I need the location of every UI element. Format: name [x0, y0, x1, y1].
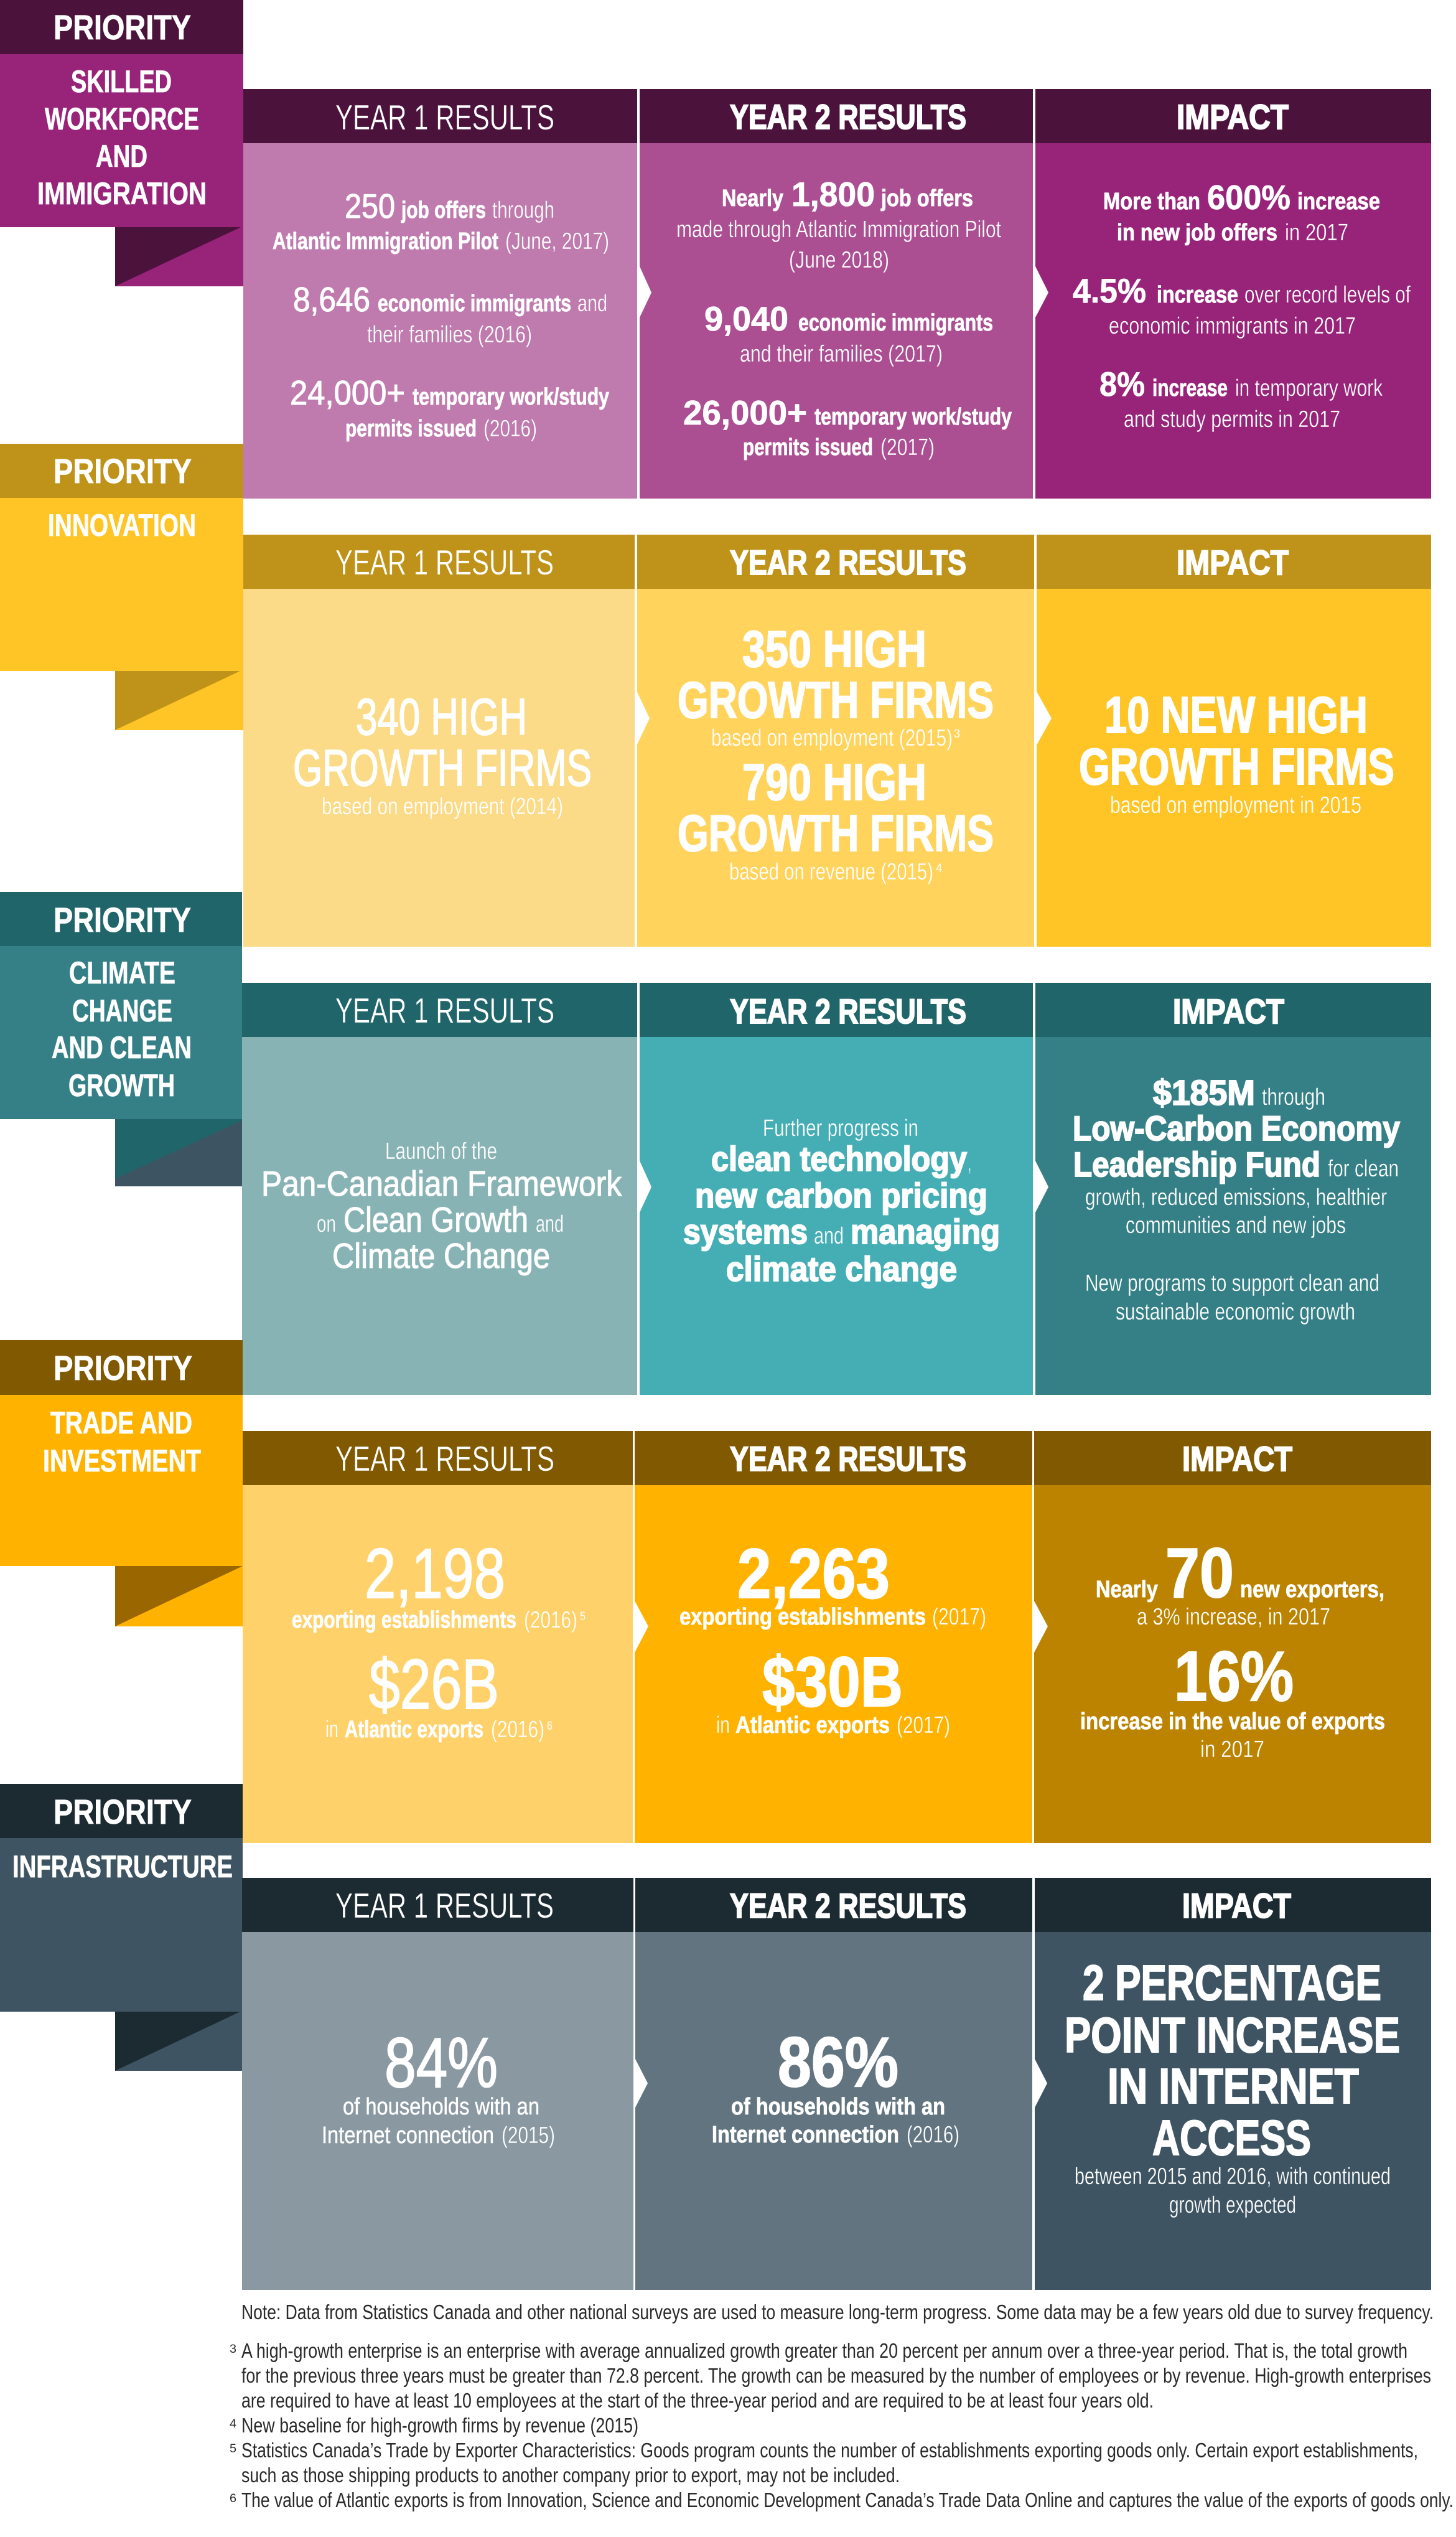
footnotes: are required to have at least 10 employees at the start of the three-year period and are required to be at least four years old. [241, 2389, 1154, 2412]
column: year 2 results [640, 983, 1033, 1395]
column: year 2 results: exporting establishments [679, 1604, 926, 1630]
arrow: year 2 to impact [1035, 2059, 1047, 2108]
column: year 2 results: 2,263 [737, 1534, 890, 1613]
column: impact: Nearly [1096, 1577, 1158, 1603]
column: year 2 results: (2017) [880, 434, 935, 461]
column: impact: communities and new jobs [1126, 1212, 1346, 1239]
column: year 2 results: 790 HIGH [742, 753, 926, 811]
column: impact: ACCESS [1152, 2110, 1311, 2165]
column: year 2 results: (2016) [907, 2122, 959, 2148]
priority ribbon: innovation [0, 444, 243, 730]
column: year 2 results: and [814, 1223, 844, 1249]
row: innovation [0, 444, 1431, 947]
column: year 1 results [243, 1431, 633, 1843]
column: year 2 results: (2017) [897, 1712, 950, 1738]
column: year 2 results: clean technology [711, 1139, 967, 1178]
priority ribbon: trade and investment: PRIORITY [54, 1348, 192, 1387]
column: impact: sustainable economic growth [1116, 1299, 1355, 1325]
column: year 2 results: based on revenue (2015) [729, 859, 933, 885]
priority ribbon: innovation: INNOVATION [48, 508, 196, 543]
footnotes: New baseline for high-growth firms by revenue (2015) [241, 2414, 638, 2437]
column: year 1 results: based on employment (2014) [322, 794, 563, 820]
column: impact: in 2017 [1285, 220, 1348, 246]
row: infrastructure [0, 1784, 1431, 2290]
column: impact: increase [1152, 375, 1228, 401]
column: impact: $185M [1153, 1073, 1255, 1113]
priority ribbon: climate change and clean growth: AND CLEAN [52, 1030, 192, 1065]
column: year 2 results: climate change [726, 1249, 957, 1288]
column: year 1 results: permits issued [345, 416, 477, 442]
column: year 1 results: $26B [369, 1645, 499, 1723]
column: year 2 results [635, 1878, 1032, 2290]
column: year 1 results: Climate Change [332, 1236, 550, 1276]
column: year 1 results: GROWTH FIRMS [293, 739, 592, 797]
column: year 2 results: made through Atlantic Immigration Pilot [676, 217, 1001, 243]
column: impact: 10 NEW HIGH [1104, 686, 1368, 744]
column: year 1 results: (2016) [483, 416, 537, 442]
column: impact [1035, 1878, 1431, 2290]
column: year 2 results: based on employment (2015) [711, 725, 953, 751]
row: trade and investment [0, 1340, 1431, 1843]
column: year 2 results: YEAR 2 RESULTS [730, 1439, 966, 1478]
column: impact: 70 [1165, 1534, 1234, 1612]
column: year 1 results: YEAR 1 RESULTS [335, 1886, 554, 1926]
column: year 1 results: 24,000+ [290, 373, 405, 412]
column: impact: IMPACT [1182, 1886, 1291, 1925]
column: year 1 results: of households with an [343, 2094, 539, 2120]
priority ribbon: climate change and clean growth [0, 892, 242, 1186]
column: year 2 results: new carbon pricing [695, 1176, 987, 1215]
column: year 2 results: of households with an [731, 2094, 945, 2120]
footnotes: such as those shipping products to another company prior to export, may not be included. [241, 2464, 900, 2487]
column: impact: increase in the value of exports [1080, 1709, 1385, 1735]
column: year 1 results: YEAR 1 RESULTS [335, 1439, 554, 1479]
column: year 1 results: on [317, 1211, 336, 1237]
column: year 2 results: 26,000+ [683, 393, 807, 432]
column: year 1 results [242, 983, 637, 1395]
column: year 1 results: (June, 2017) [505, 228, 609, 255]
arrow: year 2 to impact [1035, 1161, 1048, 1212]
priority ribbon: trade and investment: INVESTMENT [43, 1443, 201, 1478]
column: year 2 results: Internet connection [712, 2122, 899, 2148]
priority ribbon: climate change and clean growth: PRIORITY [54, 900, 191, 939]
column: year 2 results: temporary work/study [814, 404, 1012, 430]
priority ribbon: climate change and clean growth: GROWTH [68, 1068, 175, 1103]
column: year 1 results: Atlantic exports [345, 1717, 483, 1743]
column: impact: 8% [1099, 365, 1145, 403]
column: year 2 results: 86% [778, 2023, 898, 2101]
priority ribbon: infrastructure: PRIORITY [54, 1792, 192, 1831]
column: year 2 results: 3 [954, 728, 960, 741]
column: year 1 results: (2015) [502, 2122, 555, 2149]
priority ribbon: skilled workforce and immigration: AND [96, 139, 147, 174]
column: year 2 results: permits issued [743, 434, 873, 461]
column: year 2 results: YEAR 2 RESULTS [730, 543, 966, 582]
column: impact: increase [1297, 189, 1380, 215]
arrow: year 2 to impact [1037, 692, 1052, 745]
footnotes: 6 [230, 2492, 236, 2505]
column: impact: for clean [1328, 1156, 1399, 1182]
column: year 1 results: Pan-Canadian Framework [261, 1164, 622, 1204]
priority ribbon: climate change and clean growth: CLIMATE [69, 955, 175, 990]
column: year 2 results [640, 89, 1033, 499]
column: year 2 results: and their families (2017) [740, 341, 943, 367]
arrow: year 1 to year 2 [640, 1161, 651, 1212]
column: year 1 results: Launch of the [385, 1138, 497, 1165]
column: year 2 results: YEAR 2 RESULTS [730, 992, 966, 1031]
column: impact: new exporters, [1240, 1577, 1384, 1603]
arrow: year 2 to impact [1035, 266, 1048, 317]
column: impact: More than [1103, 189, 1200, 215]
column: year 1 results: exporting establishments [292, 1607, 516, 1633]
column: year 2 results: 350 HIGH [742, 620, 926, 678]
column: year 1 results: YEAR 1 RESULTS [335, 543, 554, 583]
column: year 1 results: 2,198 [365, 1534, 505, 1613]
column: year 1 results: 340 HIGH [356, 688, 527, 746]
column: year 2 results: YEAR 2 RESULTS [730, 97, 966, 136]
column: year 1 results [242, 1878, 633, 2290]
priority ribbon: infrastructure [0, 1784, 243, 2071]
column: year 1 results: Internet connection [322, 2122, 494, 2149]
column: year 1 results: temporary work/study [413, 384, 609, 410]
footnotes: 5 [230, 2442, 236, 2455]
priority ribbon: climate change and clean growth: CHANGE [72, 993, 172, 1028]
column: year 1 results: Atlantic Immigration Pilot [273, 228, 498, 255]
column: impact: over record levels of [1244, 282, 1411, 308]
priority ribbon: innovation: PRIORITY [54, 451, 192, 490]
column: impact: in 2017 [1200, 1737, 1264, 1763]
column: impact: a 3% increase, in 2017 [1137, 1604, 1330, 1630]
priority ribbon: skilled workforce and immigration: IMMIGRATION [37, 176, 207, 211]
column: year 1 results: economic immigrants [378, 291, 571, 317]
column: year 2 results: 9,040 [704, 299, 788, 338]
column: impact: increase [1157, 282, 1238, 308]
column: year 2 results: Further progress in [763, 1115, 918, 1142]
column: impact [1035, 983, 1431, 1395]
column: year 2 results: in [716, 1712, 730, 1738]
column: year 1 results: in [325, 1717, 338, 1743]
column: impact: 4.5% [1073, 271, 1146, 310]
column: impact: Leadership Fund [1073, 1145, 1320, 1184]
column: year 2 results: (2017) [932, 1604, 986, 1630]
column: impact [1035, 89, 1431, 499]
column: impact: growth expected [1169, 2192, 1296, 2218]
column: year 2 results: economic immigrants [798, 310, 993, 336]
column: impact: IMPACT [1177, 97, 1289, 136]
column: year 2 results: GROWTH FIRMS [678, 804, 994, 862]
column: year 2 results [635, 1431, 1032, 1843]
column: year 2 results: 4 [936, 862, 942, 875]
column: year 2 results: , [968, 1150, 971, 1176]
column: year 1 results: (2016) [491, 1717, 544, 1743]
arrow: year 1 to year 2 [635, 1601, 648, 1653]
column: year 2 results: systems [683, 1212, 808, 1251]
column: impact: in new job offers [1117, 220, 1277, 246]
column: impact: 600% [1207, 178, 1290, 217]
column: impact: IMPACT [1173, 992, 1284, 1031]
column: impact [1037, 535, 1431, 947]
column: year 2 results: GROWTH FIRMS [678, 671, 994, 729]
column: year 1 results: and [536, 1211, 564, 1237]
column: year 1 results: 84% [385, 2024, 498, 2102]
column: impact [1034, 1431, 1431, 1843]
column: impact: in temporary work [1235, 375, 1383, 401]
arrow: year 2 to impact [1034, 1601, 1048, 1653]
arrow: year 1 to year 2 [637, 692, 650, 744]
column: year 2 results: Atlantic exports [735, 1712, 890, 1738]
priority ribbon: skilled workforce and immigration: PRIORITY [54, 7, 191, 47]
column: year 1 results: through [492, 197, 554, 223]
arrow: year 1 to year 2 [635, 2059, 648, 2108]
priority ribbon: trade and investment [0, 1340, 243, 1626]
column: year 1 results: (2016) [524, 1607, 577, 1633]
column: year 1 results: job offers [401, 197, 486, 223]
column: impact: economic immigrants in 2017 [1109, 313, 1356, 339]
row: skilled workforce and immigration [0, 0, 1431, 499]
priority ribbon: trade and investment: TRADE AND [50, 1405, 192, 1440]
column: year 2 results: job offers [880, 185, 973, 212]
column: year 2 results: (June 2018) [789, 247, 889, 273]
column: year 1 results [243, 89, 637, 499]
column: year 2 results [637, 535, 1034, 947]
column: year 2 results: 1,800 [791, 175, 875, 213]
column: year 2 results: $30B [762, 1643, 903, 1721]
column: year 1 results: 6 [547, 1720, 553, 1733]
column: impact: New programs to support clean and [1085, 1270, 1379, 1297]
column: year 1 results: 250 [345, 187, 395, 225]
column: impact: and study permits in 2017 [1124, 406, 1340, 433]
column: year 1 results: YEAR 1 RESULTS [335, 98, 554, 138]
footnotes: 4 [230, 2417, 236, 2431]
footnotes [230, 2339, 1454, 2511]
column: year 1 results: YEAR 1 RESULTS [335, 991, 554, 1031]
column: year 2 results: Nearly [722, 185, 783, 212]
column: year 1 results [243, 535, 635, 947]
column: impact: IMPACT [1177, 543, 1289, 582]
row: climate change and clean growth [0, 892, 1431, 1395]
arrow: year 1 to year 2 [640, 266, 651, 317]
column: impact: Low-Carbon Economy [1073, 1109, 1400, 1148]
priority ribbon: skilled workforce and immigration [0, 0, 243, 286]
column: impact: based on employment in 2015 [1110, 792, 1361, 818]
column: year 1 results: their families (2016) [367, 322, 532, 348]
column: impact: IN INTERNET [1108, 2058, 1359, 2114]
column: impact: IMPACT [1182, 1439, 1292, 1478]
column: year 2 results: managing [851, 1212, 1000, 1251]
priority ribbon: infrastructure: INFRASTRUCTURE [12, 1849, 233, 1884]
column: year 1 results: 5 [580, 1610, 586, 1623]
column: year 1 results: and [577, 291, 607, 317]
column: impact: 2 PERCENTAGE [1083, 1955, 1381, 2010]
column: year 1 results: Clean Growth [343, 1200, 528, 1240]
priority ribbon: skilled workforce and immigration: SKILLED [71, 64, 172, 99]
column: year 2 results: YEAR 2 RESULTS [730, 1886, 966, 1925]
priority ribbon: skilled workforce and immigration: WORKFORCE [45, 101, 199, 136]
column: year 1 results: 8,646 [293, 280, 370, 319]
footnotes: 3 [230, 2343, 236, 2356]
column: impact: 16% [1174, 1637, 1294, 1715]
column: impact: through [1262, 1084, 1325, 1110]
